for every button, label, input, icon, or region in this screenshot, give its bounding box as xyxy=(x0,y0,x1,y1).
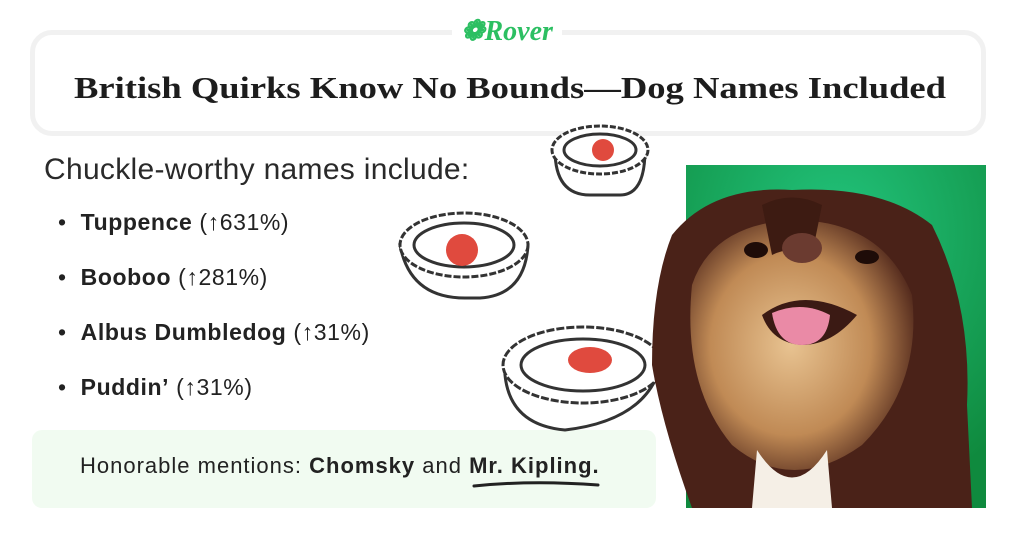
list of names: • Booboo (↑281%) xyxy=(58,264,268,290)
list of names: • Puddin’ (↑31%) xyxy=(58,374,253,400)
list of names: • Albus Dumbledog (↑31%) xyxy=(58,319,370,345)
list of names xyxy=(58,209,370,400)
title: British Quirks Know No Bounds—Dog Names Included xyxy=(74,70,946,105)
logo: Rover: ❁Rover xyxy=(461,16,553,47)
callout: honorable mentions: Honorable mentions: Chomsky and Mr. Kipling. xyxy=(80,453,600,478)
title box xyxy=(30,30,986,136)
icon: tarts xyxy=(398,124,656,432)
dog photo xyxy=(652,165,986,508)
callout: honorable mentions xyxy=(32,430,656,508)
list of names: • Tuppence (↑631%) xyxy=(58,209,289,235)
subheading: Chuckle-worthy names include: xyxy=(44,153,470,186)
